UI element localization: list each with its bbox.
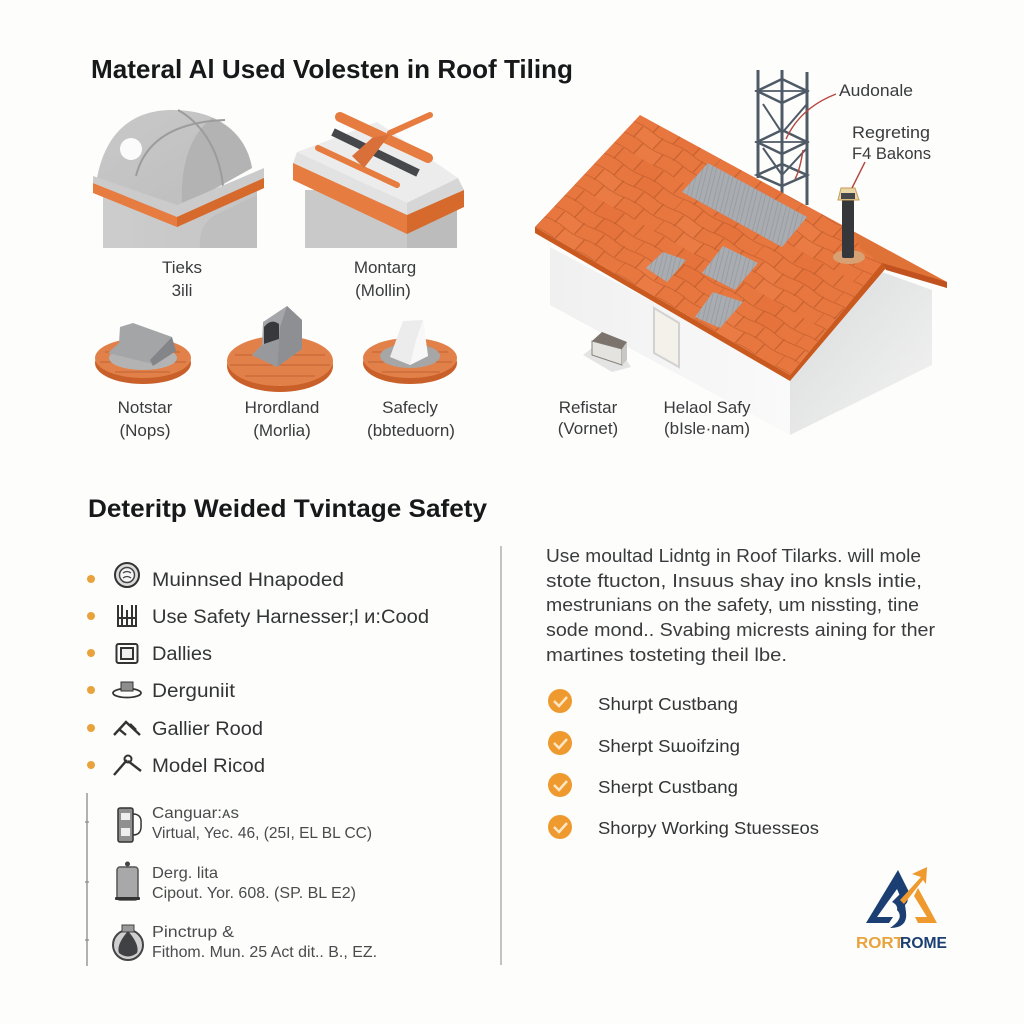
list item: Dallies: [87, 644, 212, 665]
text block: safety paragraph: martines tosteting theil lbe.: [546, 644, 787, 665]
label: Hrordland: [245, 398, 319, 440]
chimney: [833, 188, 865, 264]
label: Refistar: (Vornet): [558, 419, 618, 438]
label: Hrordland: Hrordland: [245, 398, 319, 417]
door: [654, 308, 679, 367]
label: Tieks: Tieks: [162, 258, 202, 277]
label: Regreting: F4 Bakons: [852, 144, 931, 163]
label: Safecly: (bbteduorn): [367, 421, 455, 440]
list item: Dallies: Dallies: [152, 644, 212, 665]
list item: Derguniit: [87, 681, 236, 702]
list item: Muinnsed Hnapoded: Muinnsed Hnapoded: [152, 570, 344, 591]
roof tiles: [535, 115, 947, 381]
illustration: bracket tile: [293, 115, 464, 248]
wall: right: [790, 272, 932, 435]
label: Montarg: Montarg: [354, 258, 416, 277]
equipment: Pinctrup: Fithom. Mun. 25 Act dit.. B., EZ.: [152, 944, 377, 961]
label: Tieks: 3ili: [172, 281, 192, 300]
equipment: Pinctrup: [113, 924, 377, 961]
logo: ROME: [900, 935, 947, 952]
label: Helaol Safy: (bIsle·nam): [664, 419, 750, 438]
text block: safety paragraph: sode mond.. Svabing micrests aining for ther: [546, 619, 935, 640]
label: Refistar: [558, 398, 618, 438]
check item 1: Shurpt Custbang: [598, 694, 738, 714]
list item: Model Ricod: [87, 756, 265, 777]
illustration: house with tiled roof: [535, 70, 947, 435]
list item: Use Safety Harnesser: Use Safety Harnesser;l ᴎ:Cood: [152, 607, 429, 628]
label: Audonale: Audonale: [839, 81, 913, 100]
equipment: Pinctrup: Pinctrup &: [152, 924, 234, 941]
logo: [856, 867, 947, 952]
callout lines: [786, 94, 865, 188]
label: Notstar: [118, 398, 173, 440]
label: Montarg: [354, 258, 416, 300]
panel: check items: [548, 689, 819, 839]
check item 3: Sherpt Custbang: [598, 777, 738, 797]
panel: safety checklist: [87, 563, 429, 777]
list item: Derguniit: Derguniit: [152, 681, 236, 702]
list item: Gallier Rood: Gallier Rood: [152, 719, 263, 740]
label: Refistar: Refistar: [559, 398, 618, 417]
equipment: Canguar: Virtual, Yec. 46, (25I, EL BL CC): [152, 825, 372, 842]
illustration: stone on disc: [95, 323, 191, 384]
panel: equipment list: [85, 793, 377, 966]
slate patches on roof: [646, 163, 807, 328]
icon: scaffold tower: [755, 70, 809, 205]
check item 4: [548, 815, 819, 839]
text block: safety paragraph: Use moultad Lidntg in Roof Tilarks. will mole: [546, 545, 921, 566]
equipment: Canguar: Canguar:ᴀs: [152, 805, 239, 822]
logo: RORT: [856, 935, 904, 952]
list item: Use Safety Harnesser: [87, 605, 429, 628]
label: Helaol Safy: Helaol Safy: [664, 398, 751, 417]
check item 2: [548, 731, 740, 756]
heading: safety: Deteritp Weided Tvintage Safety: [88, 495, 487, 523]
list item: Muinnsed Hnapoded: [87, 563, 344, 591]
panel: roof materials: [93, 110, 464, 440]
unit box: [583, 332, 631, 372]
label: Tieks: [162, 258, 202, 300]
equipment: Canguar: [118, 805, 372, 842]
list item: Model Ricod: Model Ricod: [152, 756, 265, 777]
label: Safecly: Safecly: [382, 398, 438, 417]
text block: safety paragraph: mestrunians on the safety, um nissting, tine: [546, 594, 919, 615]
check item 4: Shorpy Working Stuessᴇos: [598, 818, 819, 838]
check item 3: [548, 773, 738, 797]
label: Montarg: (Mollin): [355, 281, 411, 300]
label: Safecly: [367, 398, 455, 440]
equipment: Derg: [115, 862, 356, 902]
check item 2: Sherpt Sɯoifzing: [598, 736, 740, 756]
equipment: Derg: Cipout. Yor. 608. (SP. BL E2): [152, 885, 356, 902]
label: Notstar: Notstar: [118, 398, 173, 417]
illustration: dome tile: [93, 110, 264, 248]
label: Notstar: (Nops): [119, 421, 171, 440]
text block: safety paragraph: stote ftucton, Insuus shay ino knsls intie,: [546, 570, 922, 591]
label: Helaol Safy: [664, 398, 751, 438]
list item: Gallier Rood: [87, 719, 263, 740]
wall: left: [550, 247, 790, 435]
title: Materal Al Used Volesten in Roof Tiling: [91, 54, 573, 84]
label: Regreting: [852, 123, 931, 163]
label: Hrordland: (Morlia): [253, 421, 311, 440]
illustration: stone vent on disc: [227, 306, 333, 392]
text block: safety paragraph: [546, 545, 935, 665]
label: Regreting: Regreting: [852, 123, 930, 142]
check item 1: [548, 689, 738, 714]
equipment: Derg: Derg. lita: [152, 865, 218, 882]
illustration: white block on disc: [363, 320, 457, 384]
